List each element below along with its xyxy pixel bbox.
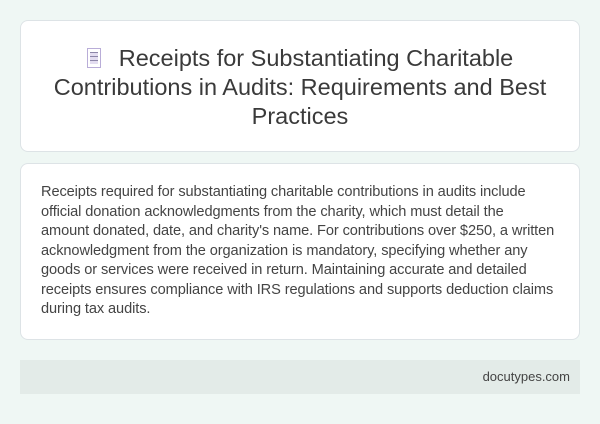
text block: during tax audits. bbox=[41, 301, 150, 317]
footer text: docutypes.com bbox=[483, 369, 570, 384]
footer bbox=[20, 360, 580, 394]
title: Receipts for Substantiating Charitable Contributions in Audits: Requirements and Best Practices bbox=[54, 45, 546, 129]
icon: receipt bbox=[87, 48, 101, 68]
text block: acknowledgment from the organization is mandatory, specifying whether any bbox=[41, 242, 527, 258]
title panel bbox=[20, 20, 580, 152]
text block bbox=[41, 184, 554, 317]
text block: official donation acknowledgments from the charity, which must detail the bbox=[41, 204, 504, 220]
text block: receipts ensures compliance with IRS regulations and supports deduction claims bbox=[41, 282, 553, 298]
text block: goods or services were received in return. Maintaining accurate and detailed bbox=[41, 262, 527, 278]
panel: description bbox=[20, 163, 580, 340]
text block: amount donated, date, and charity's name. For contributions over $250, a written bbox=[41, 223, 554, 239]
text block: Receipts required for substantiating charitable contributions in audits include bbox=[41, 184, 526, 200]
